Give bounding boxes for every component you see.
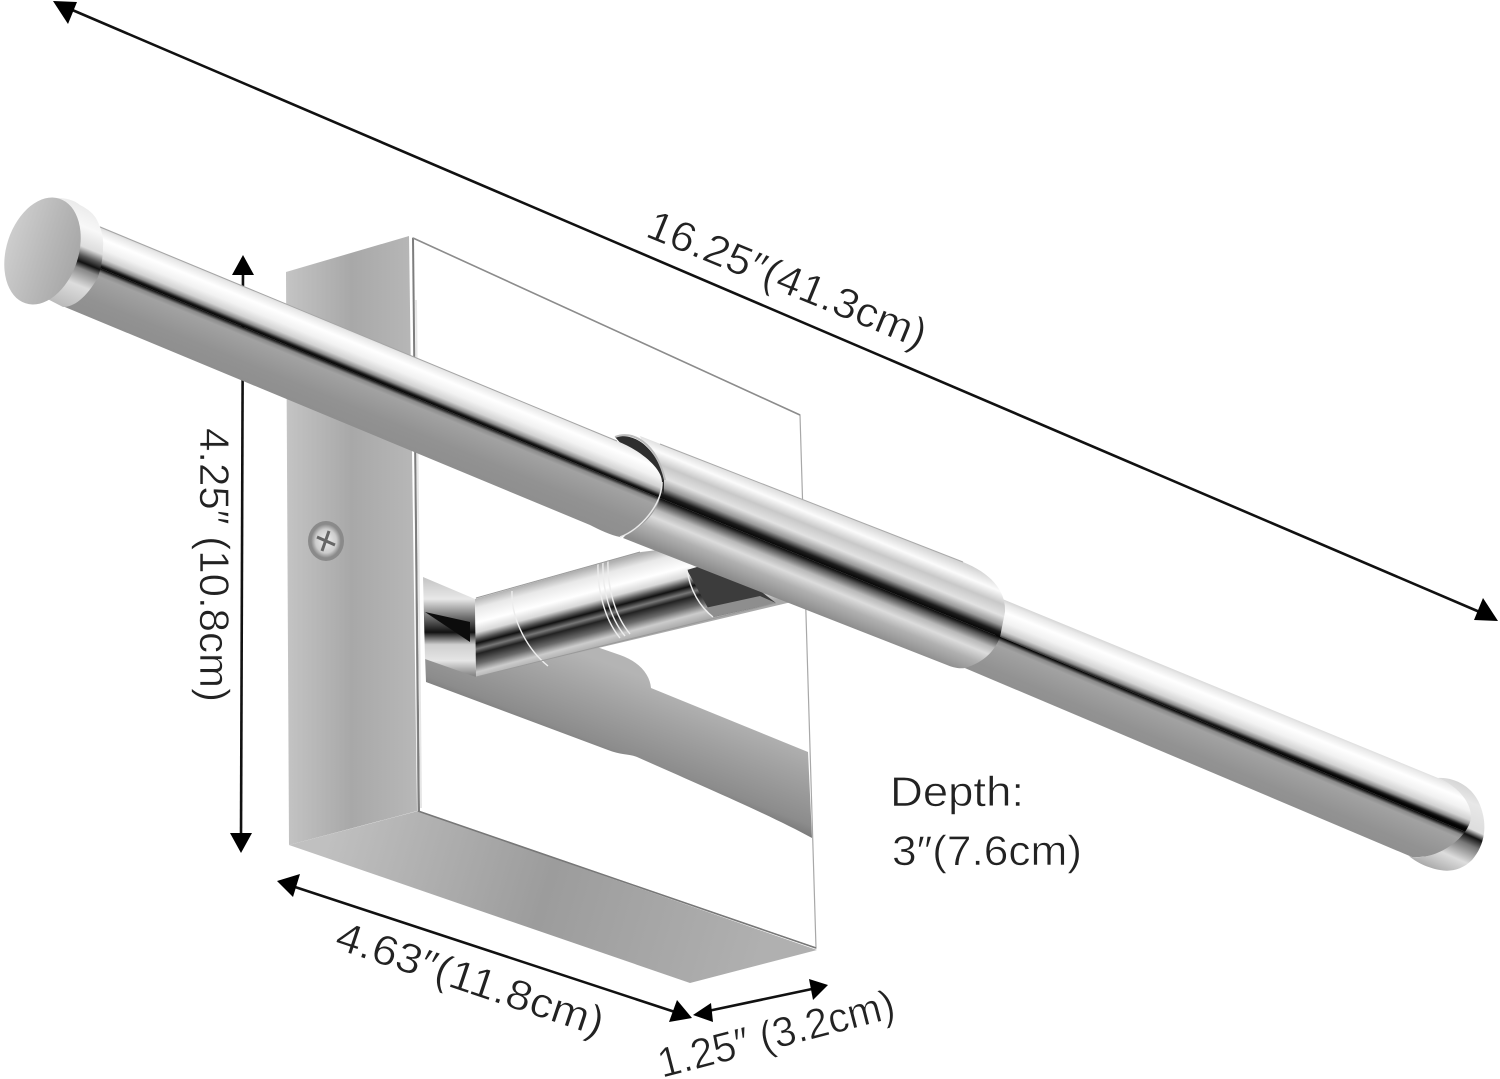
light bar (0, 188, 1484, 871)
plate width dimension arrow (277, 874, 692, 1022)
bar right segment (996, 598, 1471, 833)
depth heading: Depth: (890, 768, 1024, 815)
plate width label: 4.63″(11.8cm) (330, 912, 611, 1045)
plate thickness dimension arrow (693, 979, 828, 1022)
screw (308, 521, 344, 561)
wall plate (286, 236, 817, 983)
reflection of arm on plate (425, 646, 812, 838)
support arm (423, 540, 800, 677)
depth label (890, 768, 1082, 874)
bar sleeve (640, 436, 1005, 637)
depth value: 3″(7.6cm) (892, 827, 1082, 874)
side face of plate (286, 236, 417, 845)
height label: 4.25″ (10.8cm) (191, 428, 238, 702)
arm neck (423, 577, 476, 677)
right end cap (1408, 778, 1484, 871)
front face of plate (413, 238, 816, 948)
length label: 16.25″(41.3cm) (641, 201, 934, 357)
overall length dimension arrow (53, 1, 1498, 621)
bar left segment (85, 220, 662, 498)
height dimension line (230, 255, 254, 853)
bottom face of plate (289, 811, 817, 983)
left end cap ring (30, 198, 103, 307)
sleeve inner ring (615, 436, 664, 495)
arm tube (475, 540, 800, 677)
left end cap face (0, 188, 94, 314)
